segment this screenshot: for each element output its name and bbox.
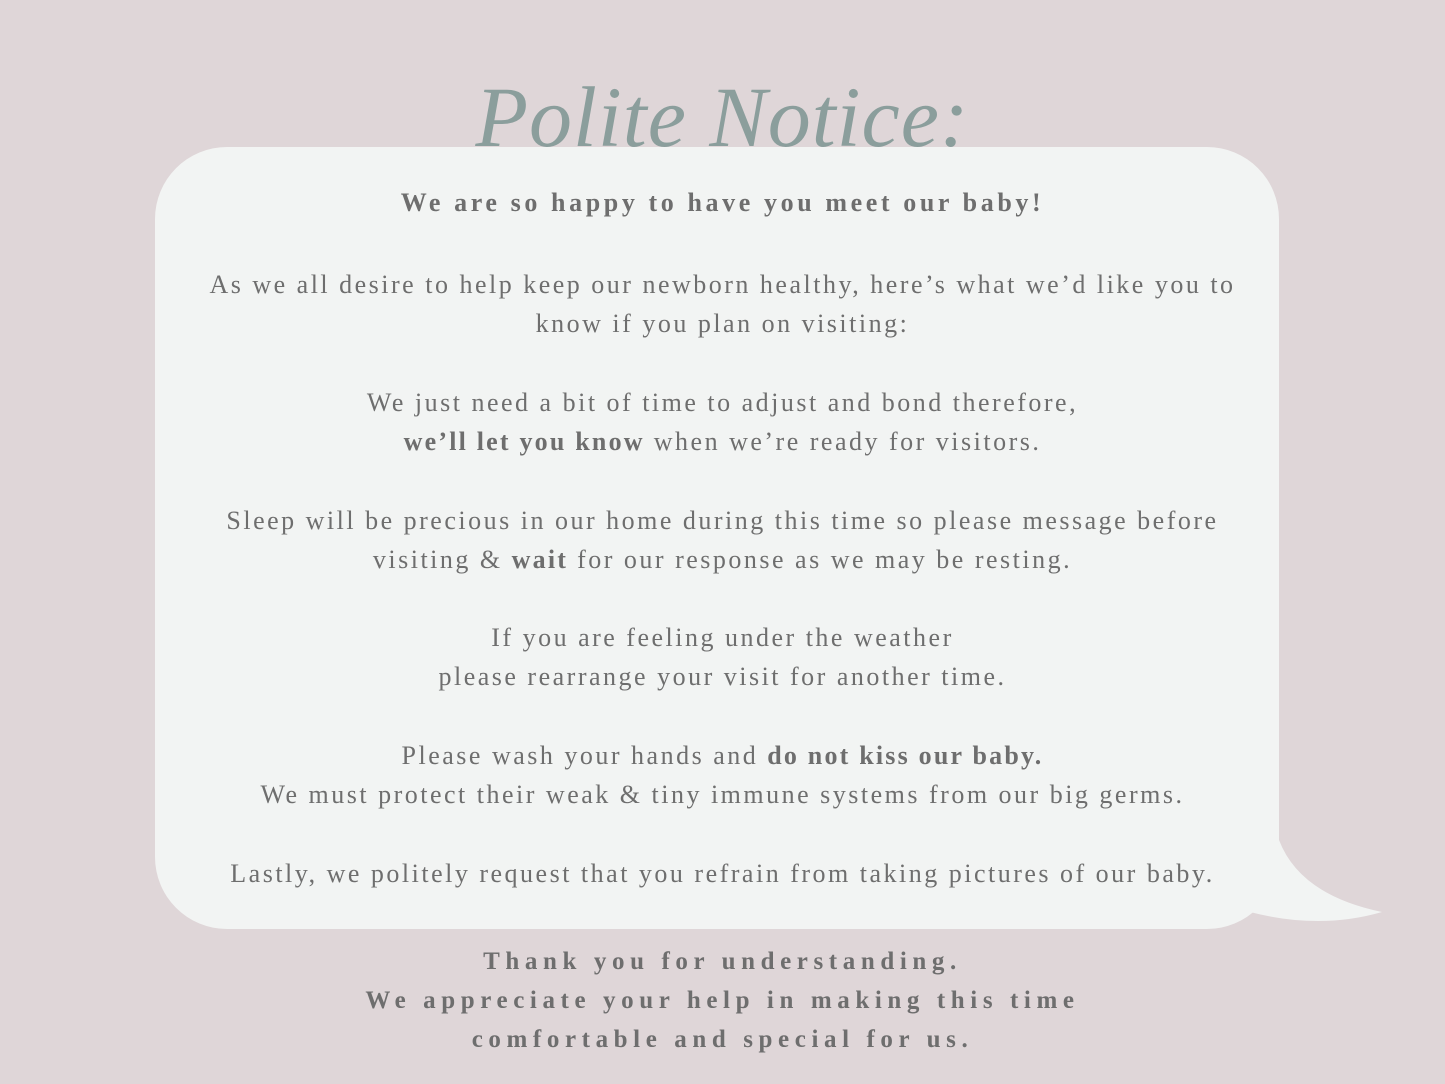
text: If you are feeling under the weather [491,623,954,652]
text: Sleep will be precious in our home during this time so please message before [226,506,1219,535]
text: We just need a bit of time to adjust and bond therefore, [367,388,1078,417]
text: We appreciate your help in making this time [365,987,1080,1014]
body text [209,188,1236,888]
text: know if you plan on visiting: [536,309,909,338]
text: please rearrange your visit for another time. [438,662,1007,691]
footer thanks [365,948,1080,1053]
text: We must protect their weak & tiny immune systems from our big germs. [261,780,1184,809]
text: Thank you for understanding. [483,948,962,975]
text: Please wash your hands and do not kiss our baby. [402,741,1043,770]
text: we’ll let you know when we’re ready for visitors. [404,427,1041,456]
text: comfortable and special for us. [472,1026,973,1053]
text: visiting & wait for our response as we may be resting. [373,545,1072,574]
text: Lastly, we politely request that you refrain from taking pictures of our baby. [230,859,1215,888]
text: We are so happy to have you meet our baby! [401,188,1044,217]
title: Polite Notice: [475,69,970,165]
text: As we all desire to help keep our newborn healthy, here’s what we’d like you to [209,270,1236,299]
